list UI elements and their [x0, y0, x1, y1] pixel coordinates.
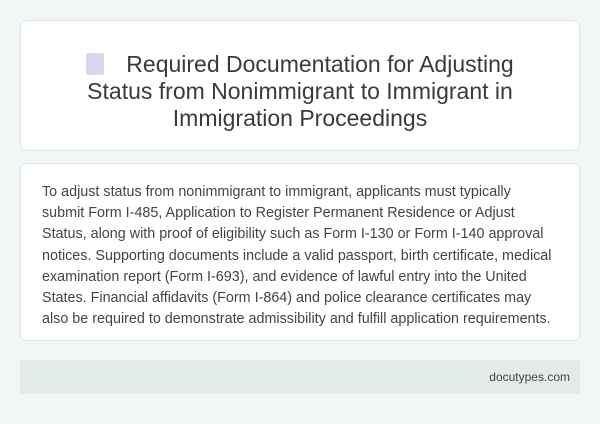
title: Required Documentation for Adjusting Status from Nonimmigrant to Immigrant in Immigration Proceedings [87, 51, 514, 131]
body card [20, 163, 580, 341]
body text: To adjust status from nonimmigrant to immigrant, applicants must typically submit Form I-485, Application to Register Permanent Residence or Adjust Status, along with proof of eligibility such as Form I-130 or Form I-140 approval notices. Supporting documents include a valid passport, birth certificate, medical examination report (Form I-693), and evidence of lawful entry into the United States. Financial affidavits (Form I-864) and police clearance certificates may also be required to demonstrate admissibility and fulfill application requirements. [42, 184, 551, 327]
footer [20, 360, 580, 394]
title card [20, 20, 580, 151]
footer: docutypes.com [489, 370, 570, 384]
